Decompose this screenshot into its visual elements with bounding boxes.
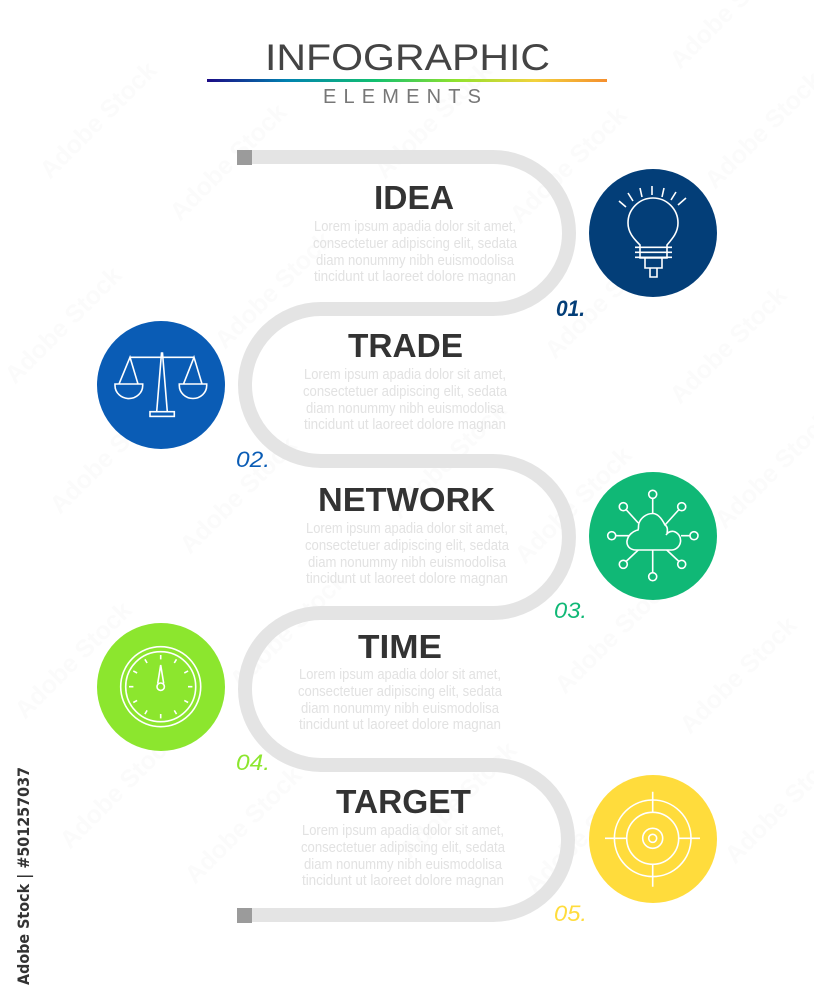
watermark pattern: Adobe Stock <box>44 391 172 519</box>
number 02: 02. <box>236 447 270 472</box>
text block: network: Lorem ipsum apadia dolor sit amet, <box>306 521 508 537</box>
watermark pattern: Adobe Stock <box>394 736 522 864</box>
watermark pattern: Adobe Stock <box>539 236 667 364</box>
text block: trade: tincidunt ut laoreet dolore magnan <box>304 417 506 433</box>
watermark pattern: Adobe Stock <box>504 101 632 229</box>
step 3: network <box>305 472 717 623</box>
subtitle: ELEMENTS <box>323 86 481 108</box>
text block: network: consectetuer adipiscing elit, sedata <box>305 538 510 554</box>
watermark pattern: Adobe Stock <box>509 441 637 569</box>
step 1: idea <box>313 169 717 321</box>
watermark pattern: Adobe Stock <box>209 226 337 354</box>
number 05: 05. <box>554 901 587 926</box>
text block: target <box>301 823 506 889</box>
heading: idea: IDEA <box>374 179 454 216</box>
text block: idea: consectetuer adipiscing elit, sedata <box>313 236 518 252</box>
watermark pattern: Adobe Stock <box>224 566 352 694</box>
text block: time <box>298 667 503 733</box>
title: INFOGRAPHIC <box>265 37 550 78</box>
icon: target crosshair <box>589 775 717 903</box>
text block: target: consectetuer adipiscing elit, sedata <box>301 840 506 856</box>
road end marker <box>237 908 252 923</box>
heading: target: TARGET <box>336 783 471 820</box>
text block: target: diam nonummy nibh euismodolisa <box>304 857 503 873</box>
watermark pattern: Adobe Stock <box>174 431 302 559</box>
watermark pattern: Adobe Stock <box>179 761 307 889</box>
text block: network <box>305 521 510 587</box>
number 01: 01. <box>556 296 585 321</box>
text block: idea: tincidunt ut laoreet dolore magnan <box>314 269 516 285</box>
text block: trade <box>303 367 508 433</box>
text block: target: Lorem ipsum apadia dolor sit amet, <box>302 823 504 839</box>
step 4: time <box>97 623 503 775</box>
text block: target: tincidunt ut laoreet dolore magnan <box>302 873 504 889</box>
text block: idea: Lorem ipsum apadia dolor sit amet, <box>314 219 516 235</box>
watermark pattern: Adobe Stock <box>0 261 127 389</box>
heading: network: NETWORK <box>318 481 495 518</box>
number 04: 04. <box>236 750 270 775</box>
watermark pattern: Adobe Stock <box>34 56 162 184</box>
icon: light bulb <box>589 169 717 297</box>
text block: trade: Lorem ipsum apadia dolor sit amet, <box>304 367 506 383</box>
heading: trade: TRADE <box>348 327 463 364</box>
text block: trade: diam nonummy nibh euismodolisa <box>306 401 505 417</box>
text block: time: Lorem ipsum apadia dolor sit amet, <box>299 667 501 683</box>
number 03: 03. <box>554 598 587 623</box>
watermark pattern: Adobe Stock <box>674 611 802 739</box>
heading: time: TIME <box>358 628 442 665</box>
text block: time: consectetuer adipiscing elit, sedata <box>298 684 503 700</box>
icon: cloud network <box>589 472 717 600</box>
rainbow divider <box>207 79 607 82</box>
text block: time: tincidunt ut laoreet dolore magnan <box>299 717 501 733</box>
watermark pattern: Adobe Stock <box>54 726 182 854</box>
watermark pattern: Adobe Stock <box>519 771 647 899</box>
stock credit: Adobe Stock | #501257037 <box>14 767 34 985</box>
watermark pattern: Adobe Stock <box>549 571 677 699</box>
road start marker <box>237 150 252 165</box>
watermark pattern: Adobe Stock <box>164 98 292 226</box>
text block: idea <box>313 219 518 285</box>
watermark pattern: Adobe Stock <box>664 281 792 409</box>
step 2: trade <box>97 321 508 472</box>
text block: network: diam nonummy nibh euismodolisa <box>308 555 507 571</box>
watermark pattern: Adobe Stock <box>384 396 512 524</box>
text block: idea: diam nonummy nibh euismodolisa <box>316 253 515 269</box>
icon: clock dial <box>97 623 225 751</box>
text block: trade: consectetuer adipiscing elit, sedata <box>303 384 508 400</box>
step 5: target <box>301 775 717 926</box>
watermark pattern: Adobe Stock <box>369 56 497 184</box>
text block: time: diam nonummy nibh euismodolisa <box>301 701 500 717</box>
text block: network: tincidunt ut laoreet dolore magnan <box>306 571 508 587</box>
winding road path <box>244 157 569 915</box>
watermark pattern: Adobe Stock <box>9 596 137 724</box>
icon: balance scale <box>97 321 225 449</box>
